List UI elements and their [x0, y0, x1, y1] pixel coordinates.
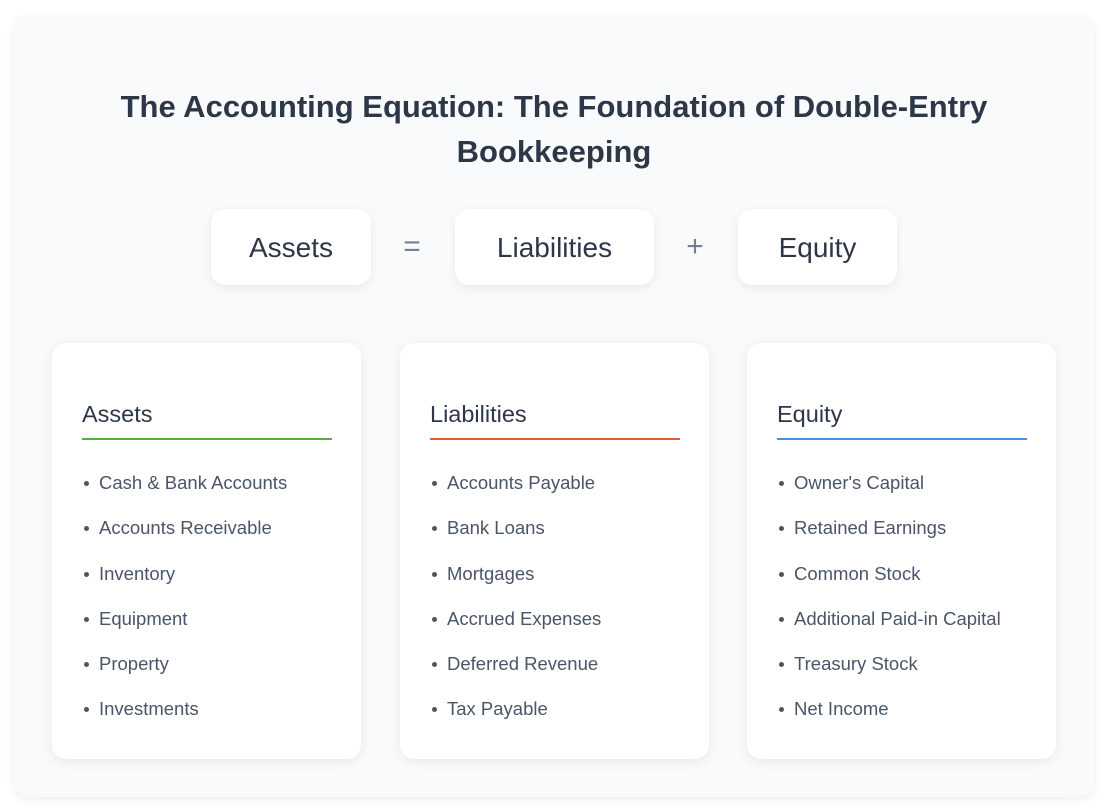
equation box: liabilities: Liabilities: [497, 232, 612, 263]
list: assets: Equipment: [99, 608, 187, 629]
heading: assets: [82, 399, 332, 440]
list: equity: [779, 472, 1001, 719]
heading: assets: Assets: [82, 401, 153, 427]
title: The Accounting Equation: The Foundation of Double-Entry: [121, 89, 987, 124]
heading: equity: [777, 399, 1027, 440]
list: assets: Cash & Bank Accounts: [99, 472, 287, 493]
panel: equity: [747, 343, 1056, 759]
list: equity: Net Income: [794, 698, 889, 719]
heading: equity: Equity: [777, 401, 842, 427]
list: equity: Common Stock: [794, 563, 920, 584]
panel: liabilities: [400, 343, 709, 759]
operator plus: +: [686, 230, 704, 263]
equation box: assets: [211, 209, 371, 285]
list: liabilities: Bank Loans: [447, 517, 545, 538]
equation box: liabilities: [455, 209, 654, 285]
panel: assets: [52, 343, 361, 759]
equation box: assets: Assets: [249, 232, 333, 263]
list: equity: Owner's Capital: [794, 472, 924, 493]
list: equity: Additional Paid-in Capital: [794, 608, 1001, 629]
list: liabilities: Deferred Revenue: [447, 653, 598, 674]
list: equity: Retained Earnings: [794, 517, 946, 538]
list: equity: Treasury Stock: [794, 653, 918, 674]
title: [120, 89, 988, 169]
list: liabilities: Mortgages: [447, 563, 534, 584]
list: liabilities: Tax Payable: [447, 698, 548, 719]
list: assets: Property: [99, 653, 169, 674]
heading: liabilities: Liabilities: [430, 401, 527, 427]
list: assets: Investments: [99, 698, 199, 719]
operator equals: =: [403, 230, 421, 263]
heading: liabilities: [430, 399, 680, 440]
list: assets: Accounts Receivable: [99, 517, 272, 538]
list: liabilities: [432, 472, 601, 719]
list: assets: Inventory: [99, 563, 175, 584]
equation box: equity: Equity: [779, 232, 856, 263]
list: liabilities: Accrued Expenses: [447, 608, 601, 629]
list: assets: [84, 472, 287, 719]
list: liabilities: Accounts Payable: [447, 472, 595, 493]
title: Bookkeeping: [457, 134, 651, 169]
equation box: equity: [738, 209, 897, 285]
